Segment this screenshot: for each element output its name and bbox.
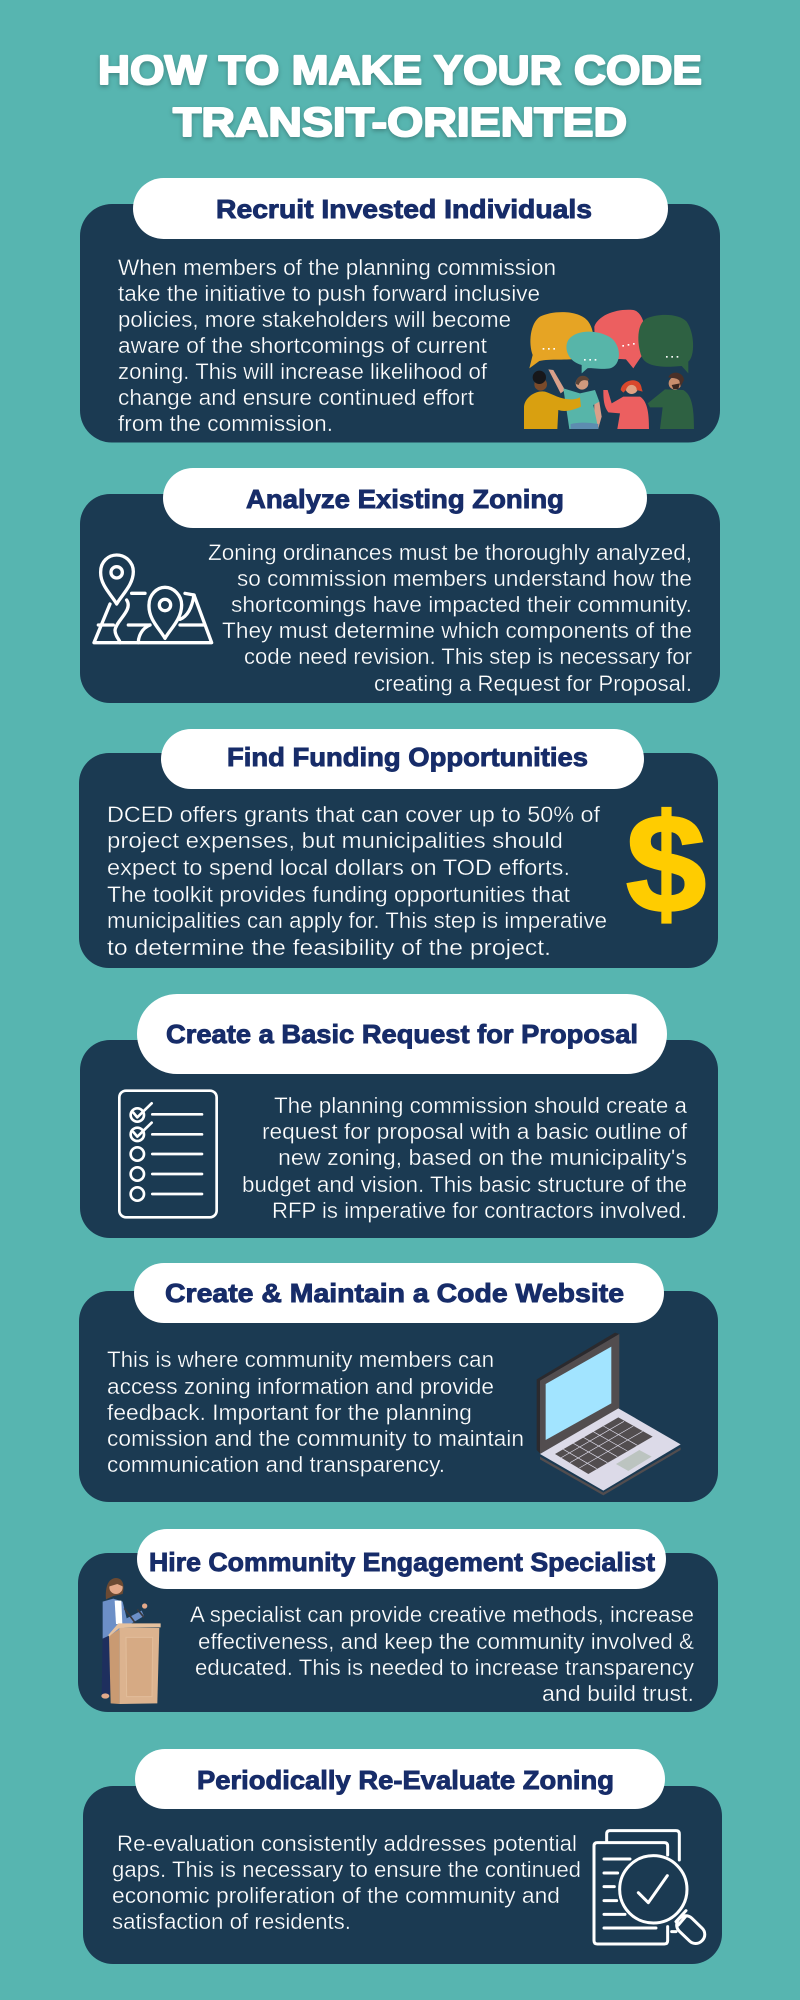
- heading: analyze existing zoning: Analyze Existing Zoning: [246, 484, 564, 514]
- text block: recruit: [118, 255, 556, 436]
- text block: funding: [107, 802, 607, 960]
- panel: recruit invested individuals: [80, 178, 720, 442]
- icon: map with pins: [94, 555, 212, 643]
- text block: funding: The toolkit provides funding opportunities that: [107, 882, 570, 907]
- heading: hire community engagement specialist: [137, 1529, 666, 1589]
- text block: website: [107, 1347, 524, 1477]
- text block: proposal: [242, 1093, 688, 1223]
- heading: periodically re-evaluate zoning: [135, 1749, 665, 1809]
- text block: recruit: When members of the planning commission: [118, 255, 556, 280]
- icon: speaker at podium: [101, 1578, 161, 1704]
- text block: recruit: policies, more stakeholders will become: [118, 307, 511, 332]
- panel: create and maintain a code website: [79, 1263, 718, 1502]
- heading: find funding opportunities: [161, 729, 644, 789]
- icon: checklist: [119, 1091, 217, 1217]
- icon: people with speech bubbles: [524, 310, 694, 429]
- text block: re-evaluate: economic proliferation of the community and: [112, 1883, 560, 1908]
- text block: analyze: creating a Request for Proposal.: [374, 671, 692, 696]
- text block: proposal: request for proposal with a basic outline of: [262, 1119, 688, 1144]
- panel: create a basic request for proposal: [80, 994, 718, 1238]
- title: HOW TO MAKE YOUR CODE: [98, 47, 702, 93]
- text block: proposal: The planning commission should create a: [274, 1093, 688, 1118]
- text block: specialist: and build trust.: [542, 1681, 694, 1706]
- text block: recruit: take the initiative to push forward inclusive: [118, 281, 540, 306]
- panel: periodically re-evaluate zoning: [83, 1749, 722, 1964]
- text block: website: access zoning information and provide: [107, 1374, 494, 1399]
- text block: re-evaluate: gaps. This is necessary to ensure the continued: [112, 1857, 581, 1882]
- text block: website: This is where community members can: [107, 1347, 494, 1372]
- text block: re-evaluate: satisfaction of residents.: [112, 1909, 351, 1934]
- text block: specialist: effectiveness, and keep the community involved &: [198, 1629, 694, 1654]
- text block: recruit: change and ensure continued effort: [118, 385, 474, 410]
- text block: funding: DCED offers grants that can cover up to 50% of: [107, 802, 601, 827]
- heading: recruit invested individuals: Recruit Invested Individuals: [216, 194, 592, 224]
- title: [98, 47, 702, 145]
- text block: website: communication and transparency.: [107, 1452, 445, 1477]
- heading: find funding opportunities: Find Funding Opportunities: [227, 742, 588, 772]
- text block: analyze: so commission members understand how the: [237, 566, 692, 591]
- text block: re-evaluate: [112, 1831, 581, 1934]
- heading: analyze existing zoning: [163, 468, 647, 528]
- text block: specialist: [190, 1602, 694, 1706]
- heading: periodically re-evaluate zoning: Periodically Re-Evaluate Zoning: [197, 1765, 614, 1795]
- text block: funding: expect to spend local dollars on TOD efforts.: [107, 855, 570, 880]
- icon: laptop: [537, 1333, 681, 1495]
- text block: website: feedback. Important for the planning: [107, 1400, 472, 1425]
- heading: create and maintain a code website: Create & Maintain a Code Website: [165, 1278, 624, 1308]
- text block: recruit: zoning. This will increase likelihood of: [118, 359, 488, 384]
- text block: proposal: new zoning, based on the municipality's: [278, 1145, 687, 1170]
- title: TRANSIT-ORIENTED: [173, 99, 627, 145]
- text block: proposal: RFP is imperative for contractors involved.: [272, 1198, 687, 1223]
- text block: analyze: code need revision. This step is necessary for: [244, 644, 692, 669]
- heading: create a basic request for proposal: [137, 994, 667, 1074]
- icon: document review magnifier: [594, 1831, 708, 1947]
- text block: re-evaluate: Re-evaluation consistently addresses potential: [117, 1831, 577, 1856]
- text block: specialist: educated. This is needed to increase transparency: [195, 1655, 694, 1680]
- heading: hire community engagement specialist: Hire Community Engagement Specialist: [149, 1547, 655, 1577]
- text block: analyze: They must determine which components of the: [222, 618, 692, 643]
- heading: create a basic request for proposal: Create a Basic Request for Proposal: [166, 1019, 638, 1049]
- panel: find funding opportunities: [79, 729, 718, 968]
- text block: recruit: from the commission.: [118, 411, 333, 436]
- text block: website: comission and the community to maintain: [107, 1426, 524, 1451]
- text block: analyze: shortcomings have impacted their community.: [231, 592, 692, 617]
- heading: create and maintain a code website: [134, 1263, 664, 1323]
- text block: proposal: budget and vision. This basic structure of the: [242, 1172, 687, 1197]
- text block: funding: to determine the feasibility of the project.: [107, 935, 551, 960]
- heading: recruit invested individuals: [133, 178, 668, 239]
- text block: funding: municipalities can apply for. This step is imperative: [107, 908, 607, 933]
- icon: dollar sign: $: [626, 786, 706, 943]
- text block: funding: project expenses, but municipalities should: [107, 828, 563, 853]
- text block: specialist: A specialist can provide creative methods, increase: [190, 1602, 694, 1627]
- text block: analyze: Zoning ordinances must be thoroughly analyzed,: [208, 540, 692, 565]
- text block: analyze: [208, 540, 692, 696]
- text block: recruit: aware of the shortcomings of current: [118, 333, 487, 358]
- panel: analyze existing zoning: [80, 468, 720, 703]
- panel: hire community engagement specialist: [78, 1529, 718, 1712]
